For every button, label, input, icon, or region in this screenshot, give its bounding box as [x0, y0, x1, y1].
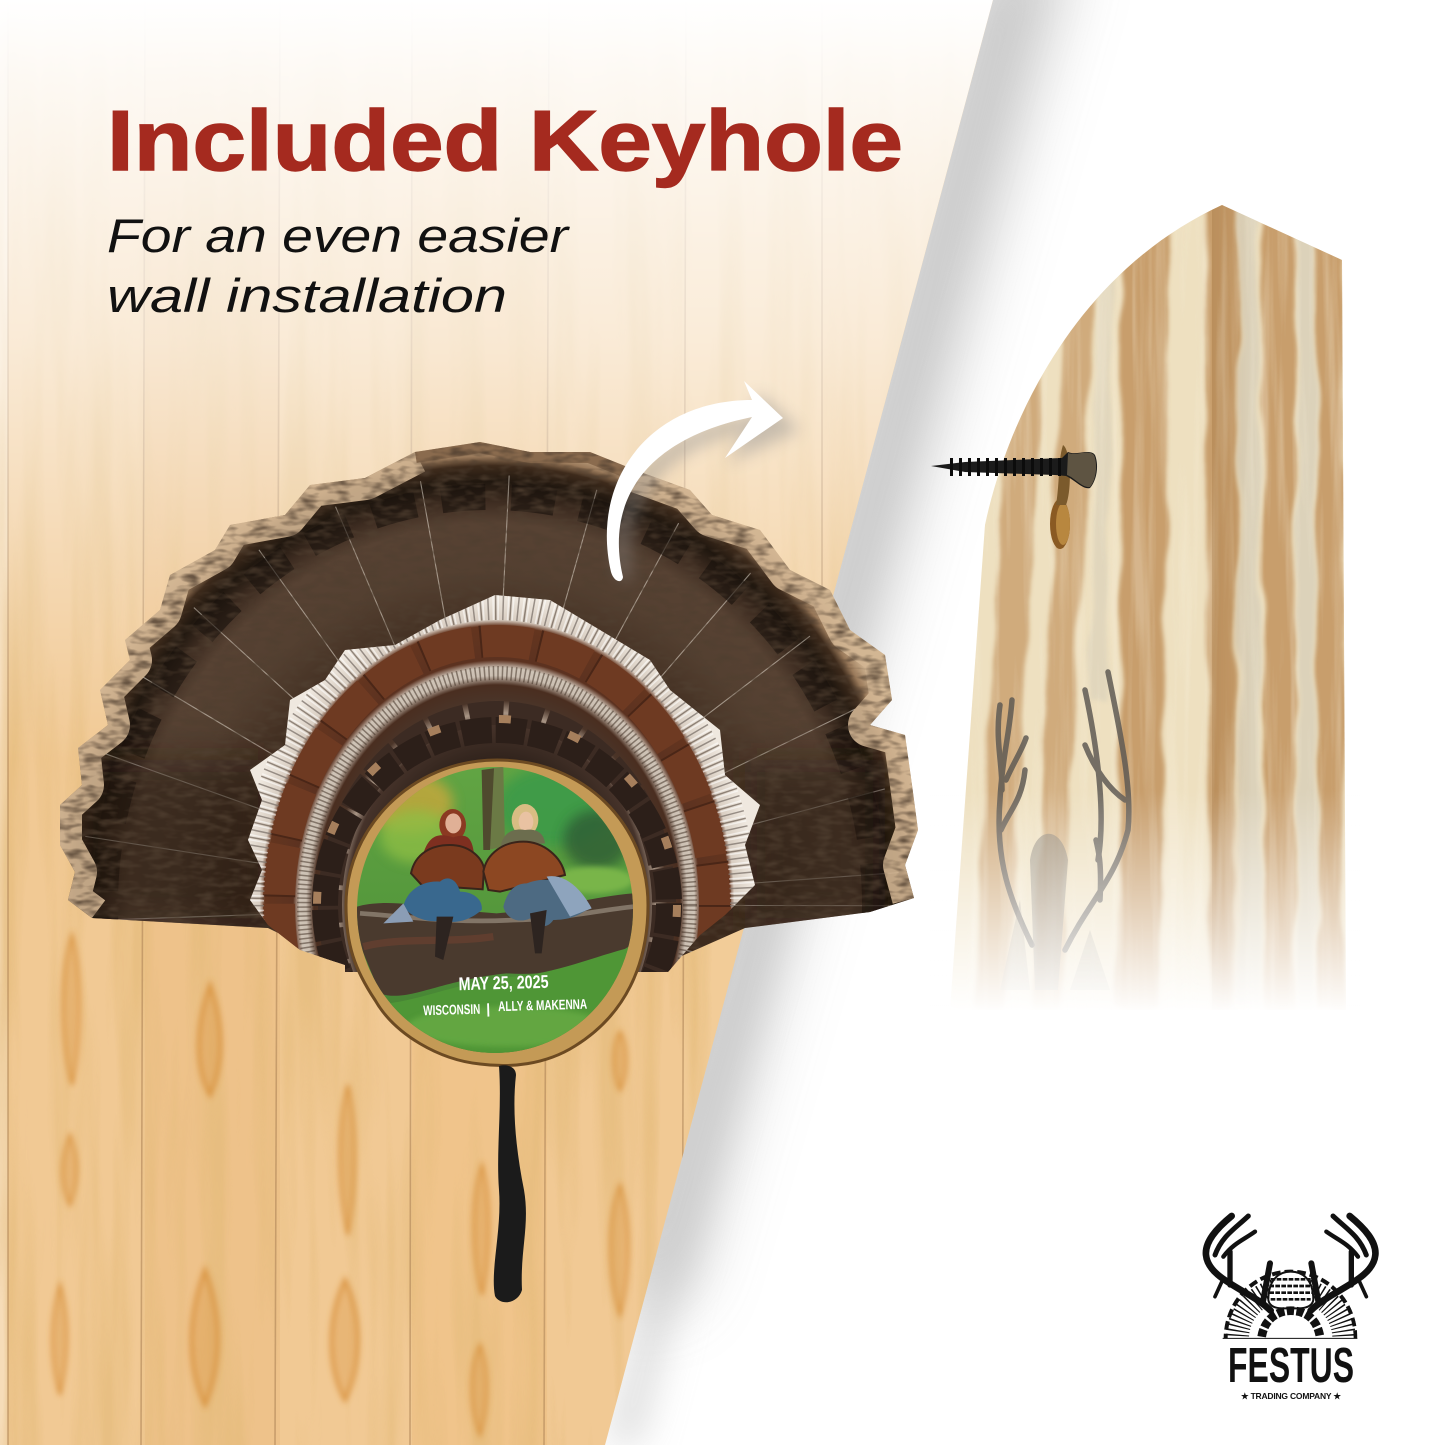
subtitle — [107, 209, 571, 322]
wood knots and flame grain — [52, 935, 628, 1435]
panel: wood plank wall — [0, 0, 1000, 1445]
left antler — [1206, 1216, 1271, 1311]
logo antlers and turkey mark — [1202, 1212, 1379, 1339]
plank seams — [8, 0, 822, 1445]
outer tail feathers — [60, 442, 918, 965]
turkey necks — [435, 917, 453, 960]
photo caption: | — [486, 1000, 490, 1016]
right antler — [1311, 1216, 1375, 1311]
tree trunks — [482, 767, 505, 850]
photo caption: ALLY & MAKENNA — [498, 996, 587, 1014]
logo wordmark: FESTUS — [1228, 1339, 1354, 1393]
disc bark edge — [346, 760, 648, 1066]
left hunter — [439, 809, 466, 841]
left turkey body — [403, 878, 482, 922]
right turkey body — [503, 880, 590, 926]
tan feather tips — [60, 452, 415, 918]
photo caption: WISCONSIN — [423, 1001, 480, 1018]
icon: curved white arrow — [607, 381, 800, 582]
red-brown block ring — [263, 625, 731, 949]
wood stripes — [975, 200, 1344, 1010]
white fringe ticks — [248, 595, 754, 920]
right hunter — [512, 804, 538, 830]
title: Included Keyhole — [107, 94, 903, 189]
turkey fan mount — [60, 442, 918, 972]
sunlit foliage — [380, 777, 460, 834]
panel: wooden board with keyhole — [930, 190, 1360, 1020]
subtitle: For an even easier — [107, 209, 571, 262]
engraved antlers on board — [998, 672, 1129, 950]
photo scene — [353, 760, 640, 1060]
photo caption — [422, 970, 587, 1018]
engraved turkey on board — [1000, 834, 1110, 990]
logo tagline: ★ TRADING COMPANY ★ — [1241, 1391, 1342, 1401]
icon: screw — [931, 452, 1097, 488]
logo: Festus Trading Company — [1206, 1216, 1375, 1405]
keyhole slot — [1050, 445, 1070, 549]
turkey fan rings — [1224, 1270, 1358, 1338]
photo caption: MAY 25, 2025 — [458, 971, 549, 994]
subtitle: wall installation — [107, 269, 507, 322]
inner brown blocks with amber gaps — [318, 701, 676, 972]
photo disc — [346, 760, 648, 1066]
feather shafts — [190, 585, 790, 1225]
right turkey fan — [483, 842, 565, 892]
log — [357, 893, 633, 996]
grass foreground — [390, 948, 628, 1053]
board fade-out — [930, 790, 1360, 1015]
turkey beard tassel — [494, 1065, 526, 1302]
left turkey fan — [411, 845, 484, 889]
middle saddle feathers — [248, 595, 760, 972]
dark feather bars — [92, 485, 888, 920]
fold shadow beside the wood panel — [605, 0, 1070, 1445]
